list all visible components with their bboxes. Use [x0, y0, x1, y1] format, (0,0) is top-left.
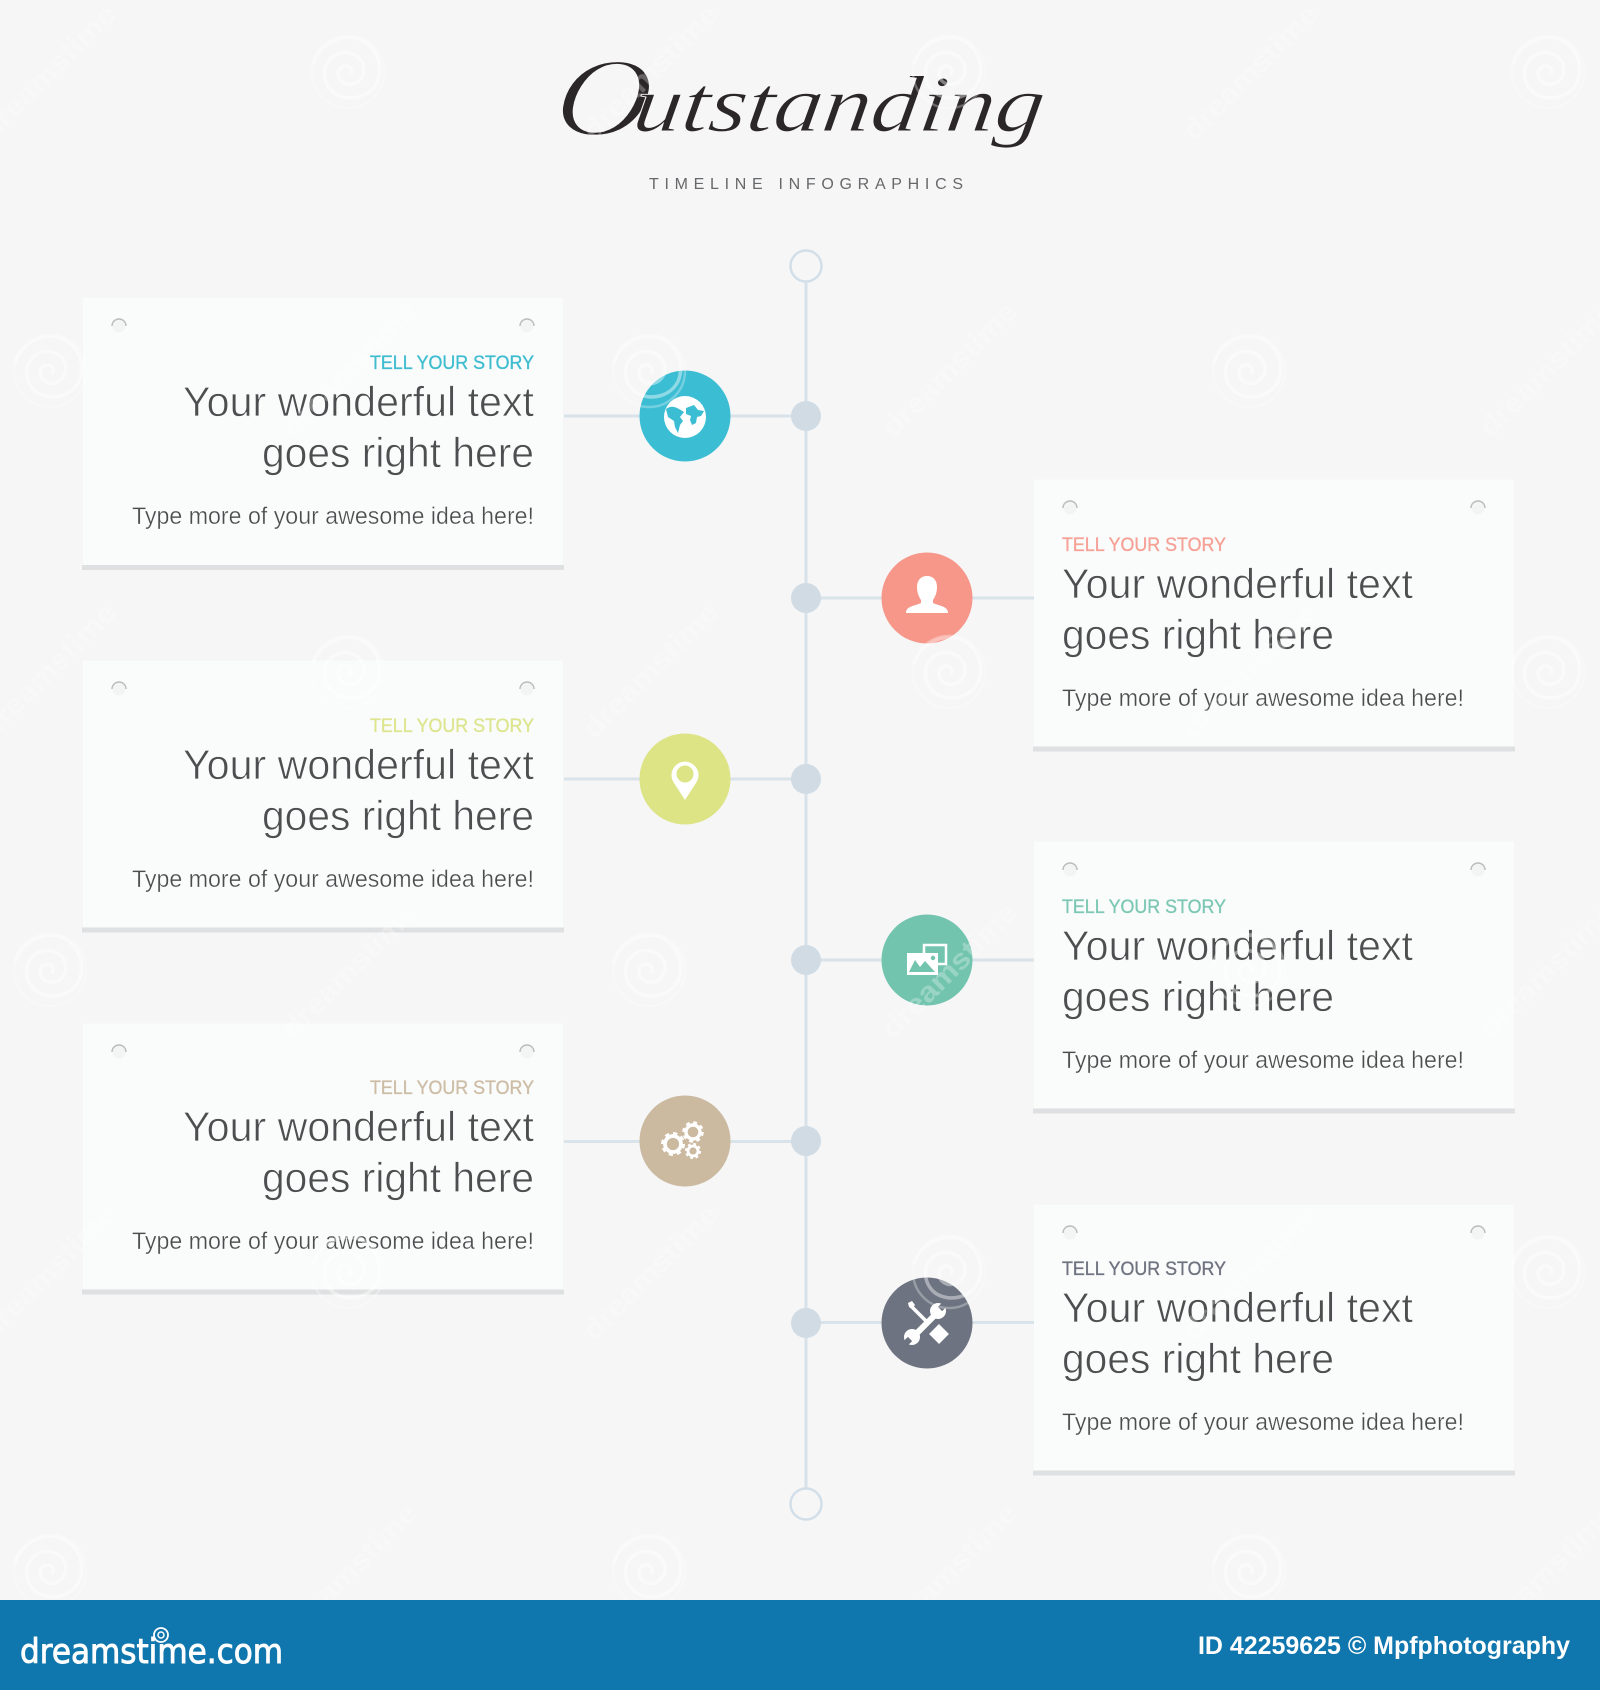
subtitle: TIMELINE INFOGRAPHICS [649, 176, 963, 193]
icon: pictures [882, 914, 972, 1006]
panel: card 3 lime [82, 660, 564, 932]
watermark diagonal text: dreamstime [1176, 596, 1325, 745]
card 1 label: TELL YOUR STORY [370, 353, 534, 374]
panel: card 2 coral [1033, 480, 1515, 752]
panel: card 1 teal [82, 298, 564, 570]
timeline end ring [790, 1488, 822, 1520]
watermark diagonal text: dreamstime [576, 0, 725, 147]
icon: globe [640, 370, 730, 462]
card 2 label: TELL YOUR STORY [1062, 535, 1226, 556]
card 6 headline: Your wonderful text [1062, 1284, 1413, 1331]
card 3 headline: Your wonderful text [183, 741, 534, 788]
panel: card 4 mint [1033, 842, 1515, 1114]
card 6 body text: Type more of your awesome idea here! [1062, 1409, 1464, 1436]
timeline spine [790, 250, 822, 1520]
panel: card 5 tan [82, 1024, 564, 1294]
card 6 headline: goes right here [1062, 1335, 1334, 1382]
card 3 body text: Type more of your awesome idea here! [132, 866, 534, 893]
card 5 label: TELL YOUR STORY [370, 1078, 534, 1099]
card 4 headline: goes right here [1062, 973, 1334, 1020]
watermark diagonal text: dreamstime [875, 1497, 1024, 1646]
card 3 label: TELL YOUR STORY [370, 716, 534, 737]
icon: tools [882, 1278, 972, 1368]
card 3 headline: goes right here [262, 792, 534, 839]
card 6 label: TELL YOUR STORY [1062, 1259, 1226, 1280]
card 2 body text: Type more of your awesome idea here! [1062, 685, 1464, 712]
title: O [548, 36, 661, 160]
watermark diagonal text: dreamstime [275, 896, 424, 1045]
card 4 label: TELL YOUR STORY [1062, 897, 1226, 918]
card 6 headline [1062, 1284, 1413, 1382]
card 1 headline [183, 378, 534, 476]
card 2 headline: Your wonderful text [1062, 560, 1413, 607]
card 1 headline: goes right here [262, 429, 534, 476]
card 4 body text: Type more of your awesome idea here! [1062, 1047, 1464, 1074]
watermark diagonal text: dreamstime [275, 1497, 424, 1646]
watermark diagonal text: dreamstime [275, 295, 424, 444]
card 5 headline: Your wonderful text [183, 1103, 534, 1150]
card 1 headline: Your wonderful text [183, 378, 534, 425]
card 5 headline: goes right here [262, 1154, 534, 1201]
watermark diagonal text: dreamstime [1176, 1198, 1325, 1347]
connector lines [564, 414, 1034, 1324]
card 3 headline [183, 741, 534, 839]
title [548, 36, 1051, 160]
icon: map pin [640, 734, 730, 824]
timeline dots [791, 401, 821, 1338]
timeline start ring [790, 250, 822, 282]
card 2 headline [1062, 560, 1413, 658]
card 4 headline: Your wonderful text [1062, 922, 1413, 969]
watermark diagonal text: dreamstime [576, 596, 725, 745]
card 2 headline: goes right here [1062, 611, 1334, 658]
title: utstanding [628, 60, 1051, 149]
watermark diagonal text: dreamstime [875, 896, 1024, 1045]
footer bar [0, 1600, 1600, 1690]
panel: card 6 grey [1033, 1204, 1515, 1476]
card 1 body text: Type more of your awesome idea here! [132, 503, 534, 530]
watermark diagonal text: dreamstime [1176, 0, 1325, 147]
icon: person [882, 552, 972, 644]
card 5 headline [183, 1103, 534, 1201]
watermark diagonal text: dreamstime [576, 1198, 725, 1347]
watermark diagonal text: dreamstime [875, 295, 1024, 444]
icon: gears [640, 1096, 730, 1186]
footer logo: dreamstime.com [20, 1632, 283, 1672]
card 4 headline [1062, 922, 1413, 1020]
footer image id and credit: ID 42259625 © Mpfphotography [1198, 1632, 1570, 1660]
card 5 body text: Type more of your awesome idea here! [132, 1228, 534, 1255]
